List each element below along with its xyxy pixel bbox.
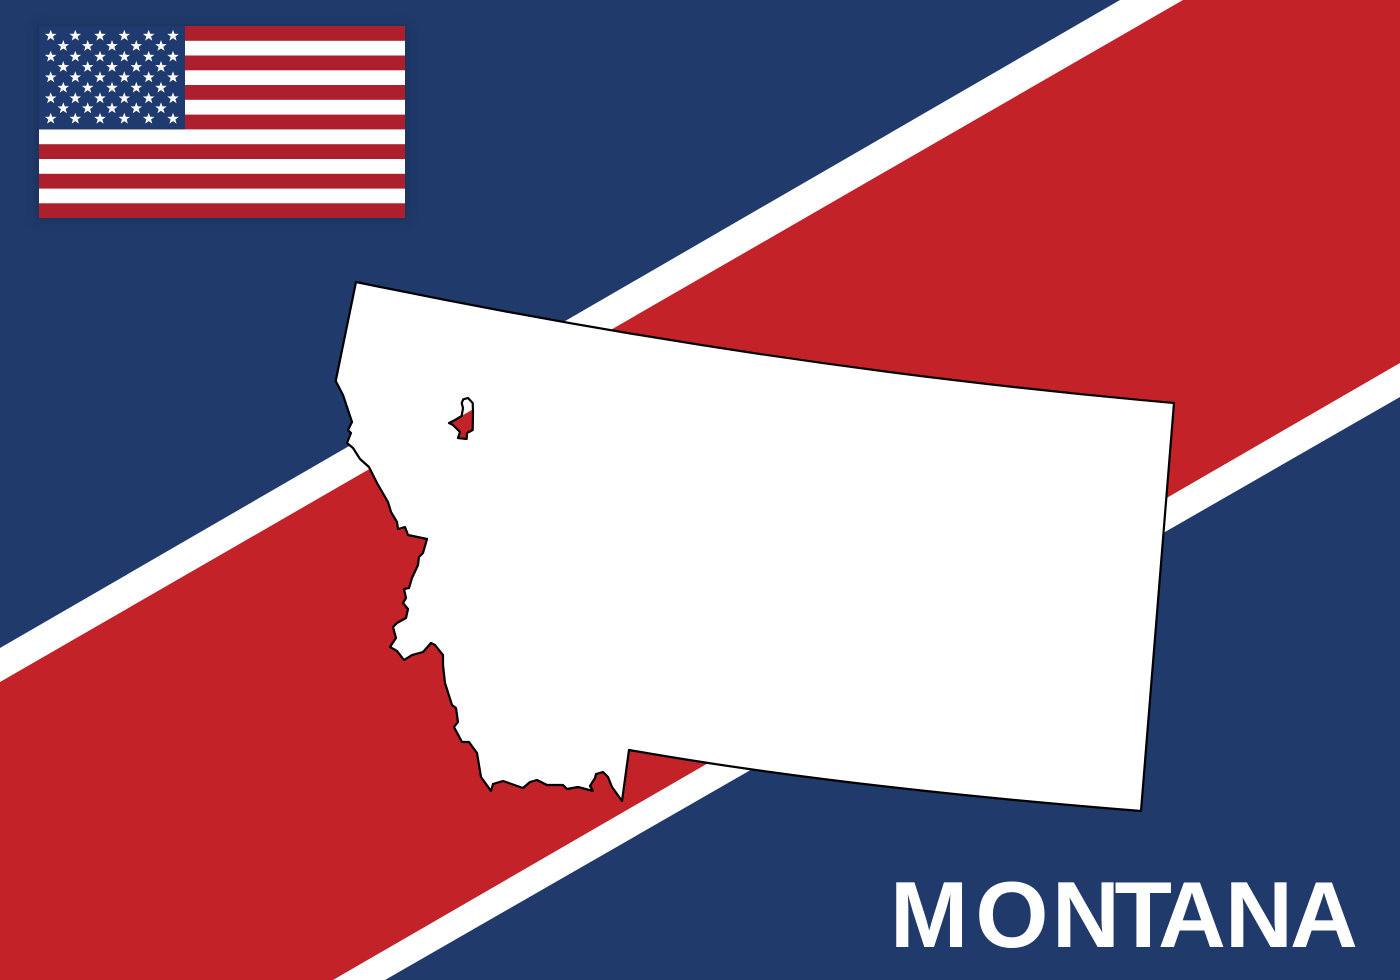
title: state name: MONTANA: [890, 862, 1358, 967]
map: Montana state outline with lake cut-out: [336, 282, 1174, 811]
flag: United States: [35, 24, 409, 222]
